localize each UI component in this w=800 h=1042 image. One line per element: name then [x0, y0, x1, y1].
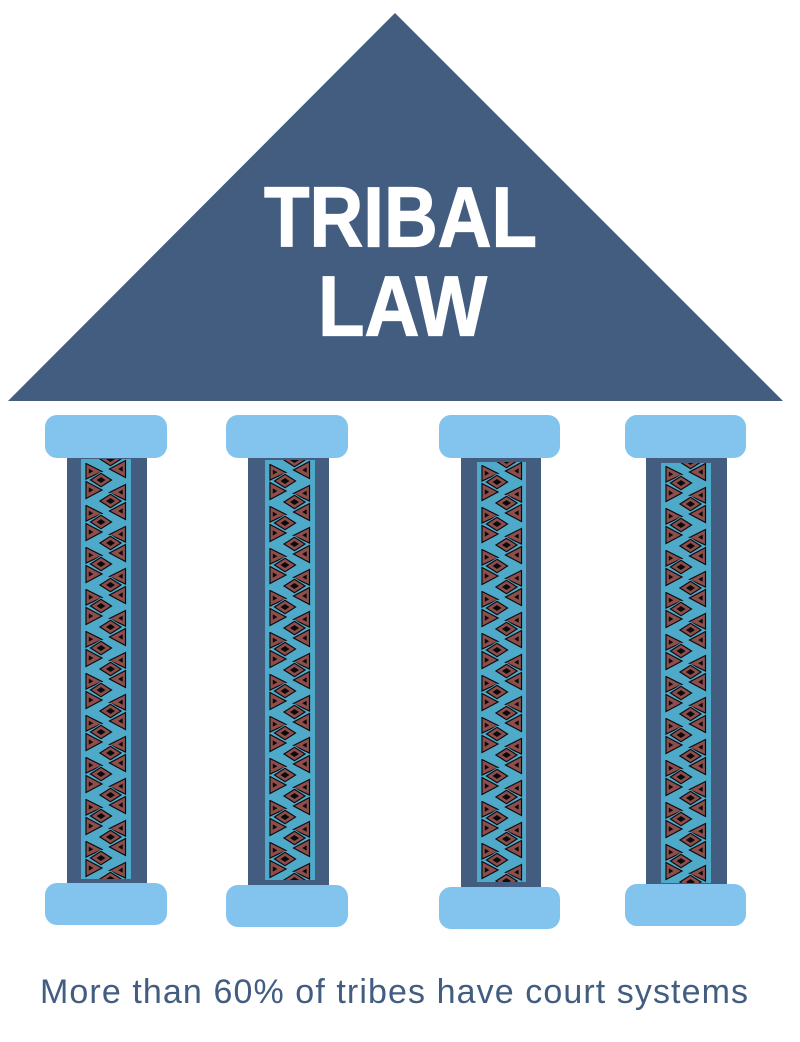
title — [264, 170, 537, 354]
title: LAW — [318, 260, 488, 354]
caption: More than 60% of tribes have court systems — [40, 973, 748, 1011]
column 3 — [439, 415, 560, 929]
roof triangle — [8, 13, 783, 401]
column 2 — [226, 415, 348, 927]
title: TRIBAL — [264, 170, 537, 266]
column 4 — [625, 415, 746, 926]
column 1 — [45, 415, 167, 925]
